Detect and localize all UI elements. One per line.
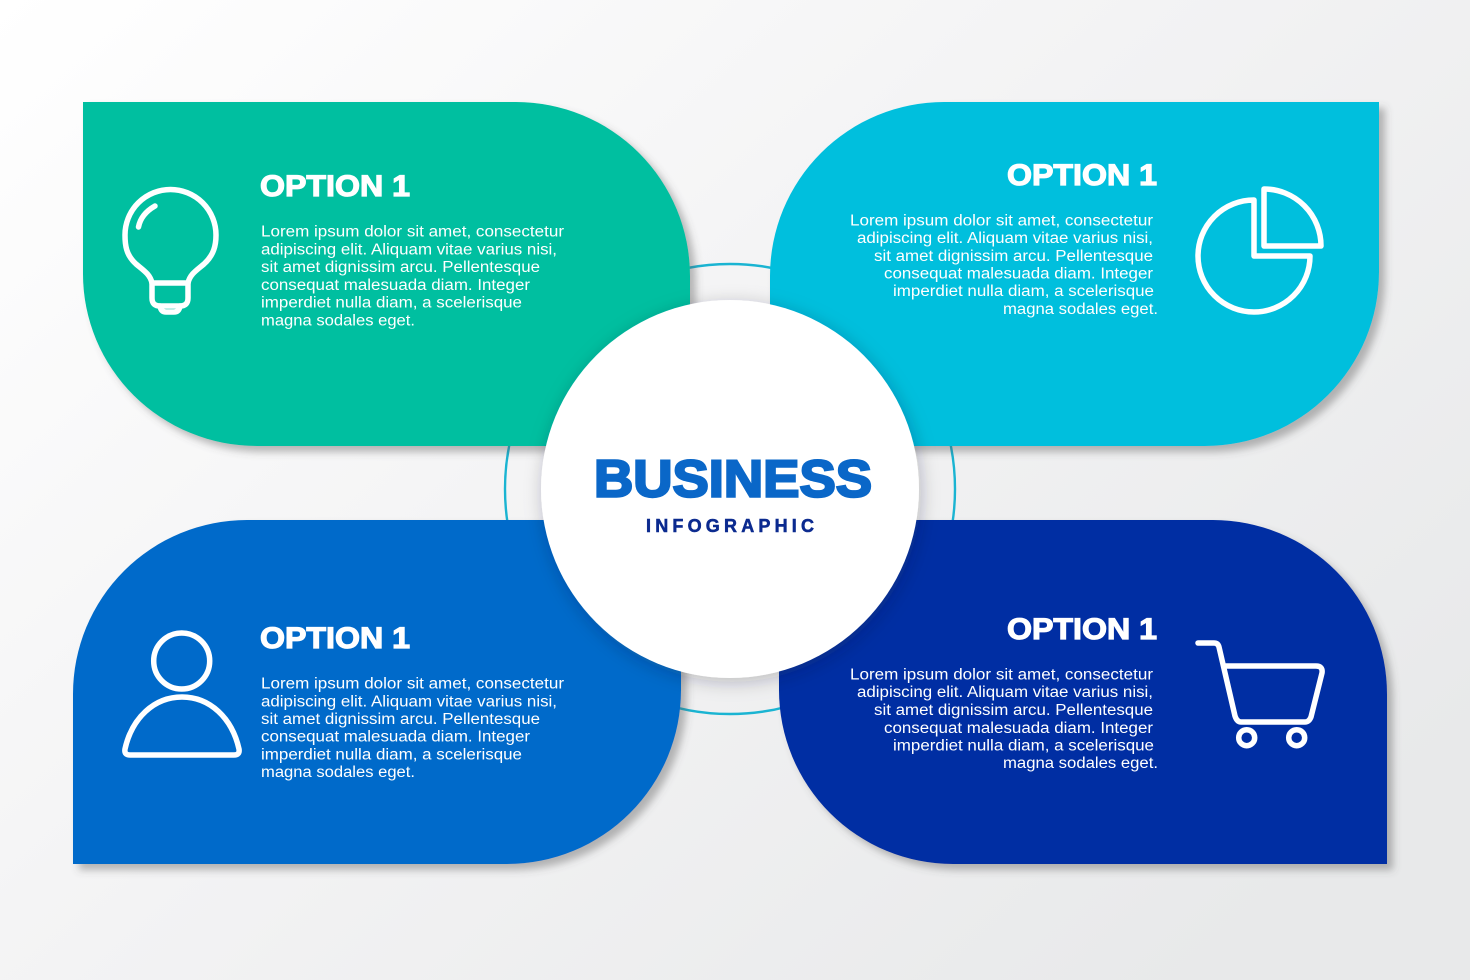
white disc bbox=[541, 300, 919, 678]
heading: OPTION 1 bbox=[1007, 613, 1157, 646]
body text: sit amet dignissim arcu. Pellentesque bbox=[874, 248, 1153, 265]
heading: OPTION 1 bbox=[260, 170, 410, 203]
body text: Lorem ipsum dolor sit amet, consectetur bbox=[850, 666, 1153, 684]
body text: Lorem ipsum dolor sit amet, consectetur bbox=[261, 676, 564, 692]
cyan panel shape bbox=[770, 102, 1379, 446]
green panel shape bbox=[83, 102, 690, 446]
body text: Lorem ipsum dolor sit amet, consectetur bbox=[261, 224, 564, 240]
body text: sit amet dignissim arcu. Pellentesque bbox=[261, 711, 540, 728]
body text bbox=[850, 666, 1158, 772]
title: BUSINESS bbox=[594, 450, 872, 508]
body text: consequat malesuada diam. Integer bbox=[884, 720, 1153, 737]
body text: adipiscing elit. Aliquam vitae varius nisi, bbox=[261, 694, 557, 710]
icon: shopping cart bbox=[1198, 643, 1322, 746]
body text: magna sodales eget. bbox=[1003, 301, 1158, 318]
panel: blue option bbox=[73, 520, 681, 864]
body text: consequat malesuada diam. Integer bbox=[261, 728, 530, 746]
body text: sit amet dignissim arcu. Pellentesque bbox=[261, 259, 540, 276]
body text: imperdiet nulla diam, a scelerisque bbox=[261, 294, 522, 312]
body text: imperdiet nulla diam, a scelerisque bbox=[893, 738, 1154, 754]
panel: green option bbox=[83, 102, 690, 446]
body text: adipiscing elit. Aliquam vitae varius nisi, bbox=[261, 242, 557, 258]
body text: magna sodales eget. bbox=[261, 764, 415, 781]
connecting ring bbox=[505, 264, 955, 714]
body text: consequat malesuada diam. Integer bbox=[884, 266, 1153, 282]
heading: OPTION 1 bbox=[1007, 159, 1157, 192]
heading: OPTION 1 bbox=[260, 622, 410, 655]
icon: person bbox=[125, 633, 239, 755]
body text: Lorem ipsum dolor sit amet, consectetur bbox=[850, 212, 1153, 230]
body text bbox=[261, 224, 564, 330]
body text: adipiscing elit. Aliquam vitae varius nisi, bbox=[857, 230, 1153, 247]
subtitle: INFOGRAPHIC bbox=[646, 516, 814, 536]
body text: sit amet dignissim arcu. Pellentesque bbox=[874, 702, 1153, 719]
panel: cyan option bbox=[770, 102, 1379, 446]
body text: adipiscing elit. Aliquam vitae varius nisi, bbox=[857, 684, 1153, 701]
body text bbox=[850, 212, 1158, 318]
body text: imperdiet nulla diam, a scelerisque bbox=[893, 283, 1154, 300]
body text: consequat malesuada diam. Integer bbox=[261, 277, 530, 294]
icon: pie chart bbox=[1198, 189, 1321, 312]
blue panel shape bbox=[73, 520, 681, 864]
body text: magna sodales eget. bbox=[1003, 755, 1158, 772]
centre circle bbox=[541, 300, 919, 678]
panel: navy option bbox=[779, 520, 1387, 864]
navy panel shape bbox=[779, 520, 1387, 864]
body text: magna sodales eget. bbox=[261, 312, 415, 330]
body text: imperdiet nulla diam, a scelerisque bbox=[261, 746, 522, 764]
body text bbox=[261, 676, 564, 781]
icon: light bulb bbox=[125, 190, 216, 312]
